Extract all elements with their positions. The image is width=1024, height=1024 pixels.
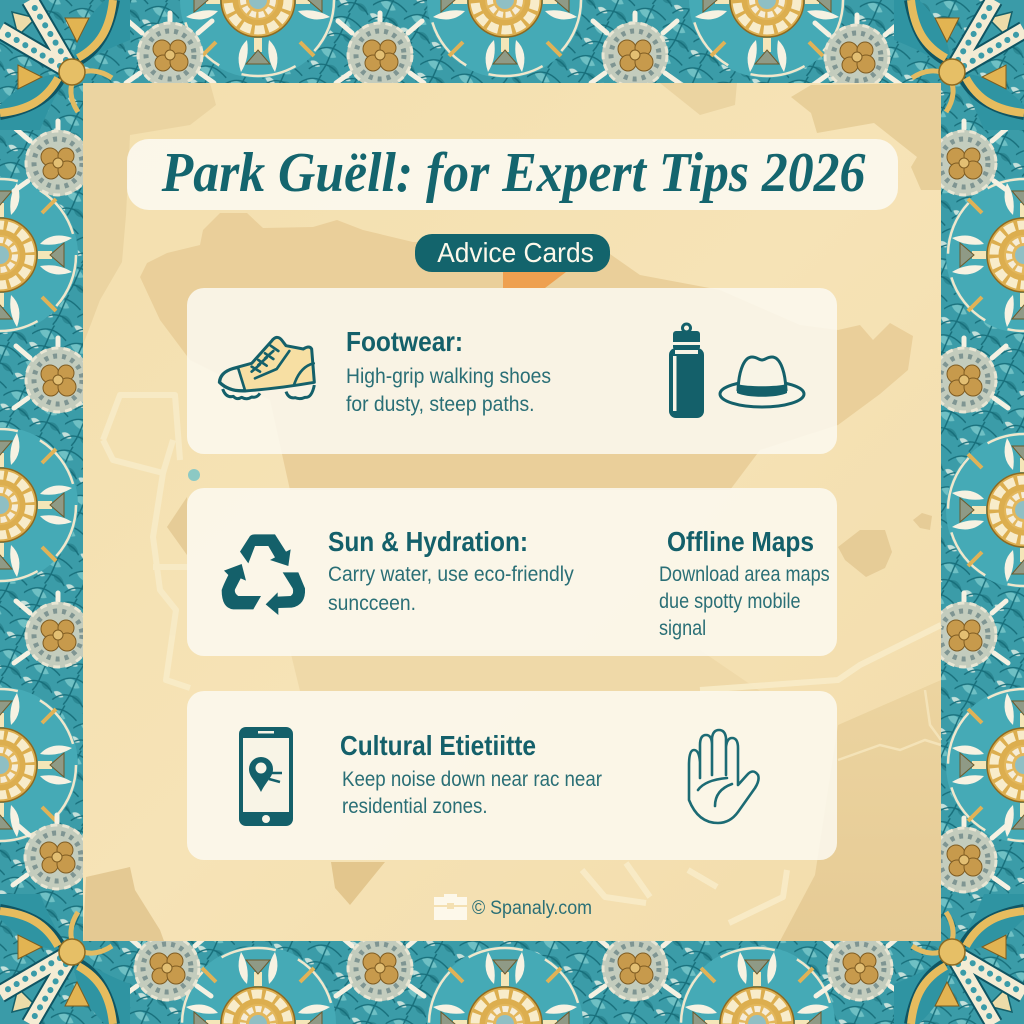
footwear text: High-grip walking shoes — [346, 364, 551, 388]
cultural etiquette text: Keep noise down near rac near — [342, 767, 602, 791]
cultural etiquette text — [342, 767, 602, 818]
footwear text: for dusty, steep paths. — [346, 392, 535, 416]
icon: briefcase — [434, 894, 467, 920]
sun and hydration text — [328, 562, 574, 615]
panel: sun and offline maps card — [187, 488, 837, 656]
offline maps text: signal — [659, 617, 706, 640]
title banner — [127, 139, 898, 210]
footwear text — [346, 364, 551, 416]
icon: recycling arrows — [222, 534, 305, 615]
icon: water bottle — [669, 322, 704, 418]
icon: raised hand — [688, 728, 760, 824]
offline maps text: Download area maps — [659, 563, 830, 586]
panel: footwear card — [187, 288, 837, 454]
icon: hiking boot — [218, 336, 316, 400]
copyright text: © Spanaly.com — [472, 898, 592, 919]
icon: sun hat — [718, 356, 806, 408]
cultural etiquette text: residential zones. — [342, 794, 488, 818]
footwear heading: Footwear: — [346, 326, 463, 357]
offline maps heading: Offline Maps — [667, 526, 814, 557]
section pill: Advice Cards — [415, 234, 610, 272]
cultural etiquette heading: Cultural Etietiitte — [340, 730, 536, 761]
sun and hydration text: Carry water, use eco-friendly — [328, 562, 574, 586]
offline maps text — [659, 563, 830, 640]
sun and hydration heading: Sun & Hydration: — [328, 526, 528, 557]
panel: cultural etiquette card — [187, 691, 837, 860]
sun and hydration text: sunccеen. — [328, 591, 416, 615]
offline maps text: due spotty mobile — [659, 590, 801, 613]
pill label: Advice Cards — [437, 237, 594, 268]
icon: phone with map pin — [239, 727, 293, 826]
footer: copyright — [434, 894, 592, 920]
title text: Park Guëll: for Expert Tips 2026 — [162, 142, 865, 204]
